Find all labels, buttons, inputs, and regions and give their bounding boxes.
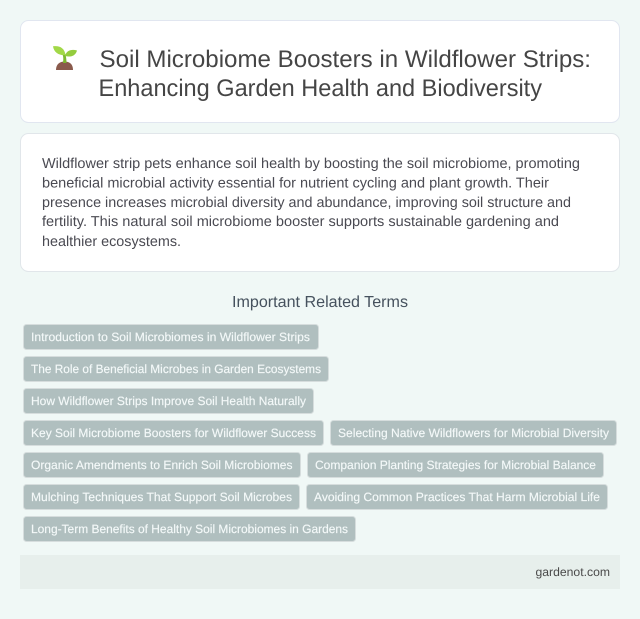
text block: description: healthier ecosystems. xyxy=(42,234,181,250)
tag xyxy=(24,356,328,382)
tag xyxy=(24,388,314,414)
text block: description xyxy=(42,156,580,250)
tag xyxy=(24,420,324,446)
panel: description xyxy=(20,134,620,272)
tag: Organic Amendments to Enrich Soil Microbiomes xyxy=(31,458,292,472)
tag: Mulching Techniques That Support Soil Microbes xyxy=(31,490,292,504)
tag xyxy=(24,452,300,478)
tag xyxy=(330,420,616,446)
tag xyxy=(24,516,356,542)
title: Enhancing Garden Health and Biodiversity xyxy=(98,75,542,102)
icon: sprout xyxy=(53,46,77,70)
tag: Introduction to Soil Microbiomes in Wildflower Strips xyxy=(31,330,310,344)
panel: title card xyxy=(20,20,620,122)
heading: related terms: Important Related Terms xyxy=(232,294,408,311)
tag: Companion Planting Strategies for Microbial Balance xyxy=(315,458,596,472)
title: Soil Microbiome Boosters in Wildflower Strips: xyxy=(100,46,591,73)
tag: The Role of Beneficial Microbes in Garden Ecosystems xyxy=(31,362,321,376)
tag xyxy=(24,484,300,510)
tag: How Wildflower Strips Improve Soil Health Naturally xyxy=(31,394,306,408)
footer source: gardenot.com xyxy=(536,565,610,579)
tag xyxy=(308,452,604,478)
tag xyxy=(24,324,318,350)
text block: description: beneficial microbial activity essential for nutrient cycling and plant growth. Their xyxy=(42,176,549,192)
text block: description: presence increases microbial diversity and abundance, improving soil structure and xyxy=(42,195,571,211)
tag list xyxy=(24,324,616,542)
tag: Selecting Native Wildflowers for Microbial Diversity xyxy=(338,426,609,440)
tag: Long-Term Benefits of Healthy Soil Microbiomes in Gardens xyxy=(31,522,348,536)
tag: Key Soil Microbiome Boosters for Wildflower Success xyxy=(31,426,316,440)
text block: description: fertility. This natural soil microbiome booster supports sustainable gardening and xyxy=(42,214,559,230)
footer xyxy=(20,555,620,589)
tag: Avoiding Common Practices That Harm Microbial Life xyxy=(314,490,600,504)
title xyxy=(98,46,591,102)
tag xyxy=(306,484,608,510)
text block: description: Wildflower strip pets enhance soil health by boosting the soil microbiome, promoting xyxy=(42,156,580,172)
